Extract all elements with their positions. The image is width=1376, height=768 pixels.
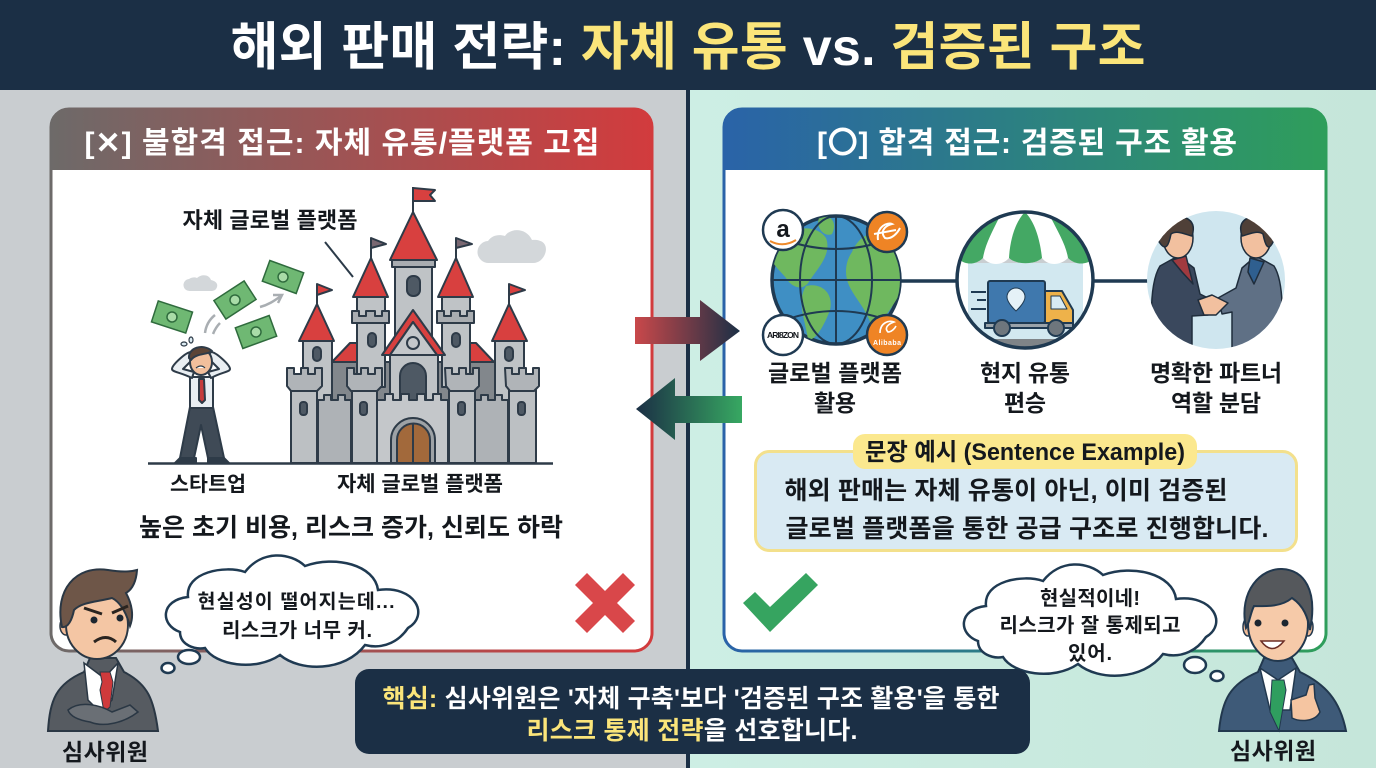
logo: orange bottom: Alibaba	[873, 340, 901, 347]
icon: red X	[575, 573, 635, 633]
label: partner roles: 명확한 파트너	[1150, 360, 1282, 386]
illustration: stressed startup person	[172, 347, 230, 463]
thought bubble: skeptical	[162, 555, 418, 673]
arrow: red to right	[635, 300, 740, 361]
label: global platform	[768, 360, 902, 416]
logo: orange top	[867, 212, 907, 252]
label: own global platform: 자체 글로벌 플랫폼	[337, 473, 503, 496]
thought bubble: satisfied: 있어.	[1068, 642, 1112, 665]
thought bubble: skeptical: 현실성이 떨어지는데...	[198, 591, 394, 613]
judge body	[1219, 658, 1346, 731]
gate	[377, 394, 448, 463]
truck	[971, 281, 1073, 336]
panel heading: passing approach: [〇] 합격 접근: 검증된 구조 활용	[817, 127, 1237, 160]
logo: a: a	[776, 216, 790, 243]
label: startup: 스타트업	[170, 473, 246, 496]
label: partner roles: 역할 분담	[1171, 390, 1261, 416]
judge face	[90, 616, 98, 624]
icon: clouds	[183, 230, 546, 291]
middle towers	[357, 297, 385, 387]
outer rear towers	[303, 341, 332, 401]
arrow: green to left	[636, 378, 742, 440]
icon: storefront truck	[955, 210, 1095, 359]
thought bubble: satisfied	[964, 564, 1224, 681]
left partner	[1151, 258, 1208, 345]
background: left half	[0, 90, 687, 768]
title banner	[0, 0, 1376, 90]
curtain walls	[318, 395, 351, 463]
logo: wordmark: ARI8ZON	[767, 330, 799, 340]
illustration: castle	[287, 187, 539, 463]
pill heading: 문장 예시 (Sentence Example)	[865, 439, 1185, 466]
judge head	[60, 617, 72, 635]
key takeaway box: 리스크 통제 전략을 선호합니다.	[526, 717, 858, 745]
label: partner roles	[1150, 360, 1282, 416]
sentence text: 글로벌 플랫폼을 통한 공급 구조로 진행합니다.	[786, 515, 1268, 543]
pointer line to castle	[325, 242, 353, 277]
gatehouse gable	[390, 350, 438, 405]
label: judge left: 심사위원	[62, 739, 148, 765]
sentence text: 해외 판매는 자체 유통이 아닌, 이미 검증된	[784, 477, 1228, 505]
logo: orange bottom	[867, 315, 907, 355]
label: local distribution: 편승	[1004, 390, 1046, 416]
icon: green check	[743, 573, 818, 632]
front towers	[291, 390, 317, 463]
text: drawbacks: 높은 초기 비용, 리스크 증가, 신뢰도 하락	[139, 514, 563, 542]
label: local distribution	[980, 360, 1070, 416]
label: local distribution: 현지 유통	[980, 360, 1070, 386]
label: global platform: 글로벌 플랫폼	[768, 360, 902, 386]
label: own platform callout: 자체 글로벌 플랫폼	[182, 208, 358, 233]
icon: sweat drops	[181, 337, 193, 346]
title: 해외 판매 전략: 자체 유통 vs. 검증된 구조	[230, 19, 1146, 77]
judge: satisfied	[1219, 569, 1346, 731]
judge head	[1243, 618, 1253, 636]
icon: partner handshake	[1147, 211, 1285, 360]
panel heading: failing approach: [✕] 불합격 접근: 자체 유통/플랫폼 고집	[84, 127, 600, 160]
logo: wordmark	[763, 315, 803, 355]
central keep	[395, 262, 432, 342]
panel heading: passing approach	[723, 108, 1327, 170]
thought bubble: satisfied: 현실적이네!	[1040, 587, 1140, 610]
judge: skeptical	[48, 569, 158, 731]
ground line	[148, 462, 553, 465]
sentence text	[784, 477, 1268, 543]
hands	[1198, 295, 1228, 315]
judge body	[48, 658, 158, 731]
thought bubble: satisfied: 리스크가 잘 통제되고	[1000, 614, 1180, 637]
judge face	[1254, 620, 1262, 626]
back walls	[332, 362, 497, 402]
label: judge right: 심사위원	[1230, 738, 1316, 764]
callout: sentence example	[756, 434, 1296, 550]
icon: globe with marketplace logos	[763, 210, 907, 355]
label: global platform: 활용	[814, 390, 856, 416]
logo: a	[763, 210, 803, 250]
connector line	[895, 279, 1150, 283]
panel heading: failing approach	[50, 108, 653, 170]
key takeaway box: 핵심: 심사위원은 '자체 구축'보다 '검증된 구조 활용'을 통한	[382, 685, 1000, 713]
key takeaway box	[355, 669, 1030, 754]
arrow: money motion	[205, 295, 282, 334]
right partner	[1218, 258, 1282, 348]
background: right half	[689, 90, 1376, 768]
illustration: flying money	[151, 261, 304, 348]
panel: passing approach	[723, 108, 1327, 651]
panel: failing approach	[50, 108, 653, 651]
thought bubble: skeptical: 리스크가 너무 커.	[222, 619, 372, 642]
